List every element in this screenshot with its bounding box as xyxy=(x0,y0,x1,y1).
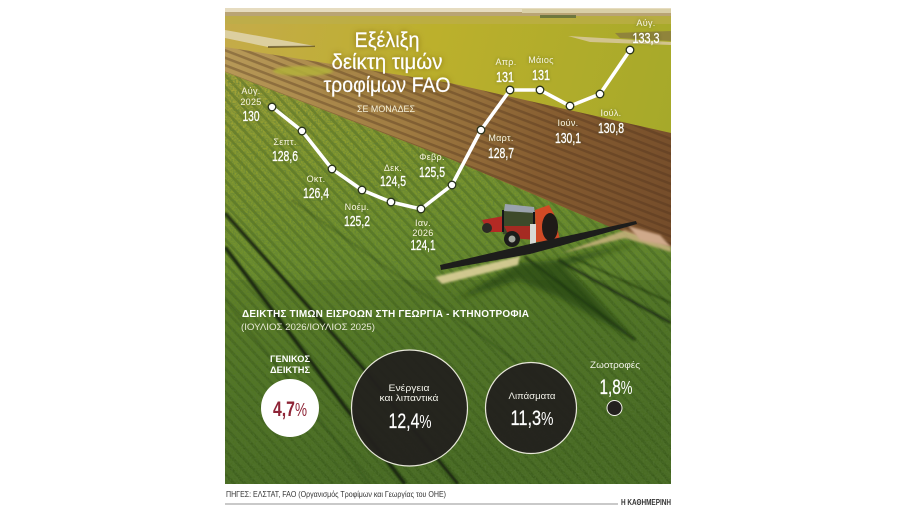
bubble: fertilizers: 11,3% xyxy=(510,407,554,430)
line chart: FAO index: Μάιος xyxy=(528,55,554,65)
bubble: general index: 4,7% xyxy=(273,398,307,421)
line chart: FAO index: Μαρτ. xyxy=(488,133,514,143)
line chart: FAO index: 2025 xyxy=(240,97,262,107)
line chart: FAO index: 128,6 xyxy=(272,148,298,165)
line chart: FAO index: 131 xyxy=(532,67,550,84)
line chart: FAO index xyxy=(240,18,660,254)
bubble: energy and lubricants: και λιπαντικά xyxy=(380,393,439,404)
line chart: FAO index: 130,8 xyxy=(598,120,624,137)
background photo: tractor in green field xyxy=(225,8,671,484)
bubble: energy and lubricants: Ενέργεια xyxy=(388,383,430,394)
line chart: FAO index: Οκτ. xyxy=(307,174,325,184)
title: Εξέλιξη xyxy=(354,29,420,52)
line chart: FAO index: 126,4 xyxy=(303,185,329,202)
tractor shadow xyxy=(460,242,637,338)
line chart: FAO index: 2026 xyxy=(412,228,434,238)
title: δείκτη τιμών xyxy=(332,51,442,74)
infographic xyxy=(225,8,671,505)
subtitle: units: ΣΕ ΜΟΝΑΔΕΣ xyxy=(357,104,415,114)
line chart: FAO index: Αύγ. xyxy=(636,18,656,28)
subheading: period: (ΙΟΥΛΙΟΣ 2026/ΙΟΥΛΙΟΣ 2025) xyxy=(241,322,375,333)
spray trail xyxy=(435,256,520,284)
bubble: animal feed: Ζωοτροφές xyxy=(590,360,640,371)
line chart: FAO index: 131 xyxy=(496,69,514,86)
line chart: FAO index: 125,5 xyxy=(419,164,445,181)
line chart: FAO index: 128,7 xyxy=(488,145,514,162)
bubble: general index: ΔΕΙΚΤΗΣ xyxy=(270,365,310,376)
line chart: FAO index: Δεκ. xyxy=(384,163,402,173)
heading: input price index: ΔΕΙΚΤΗΣ ΤΙΜΩΝ ΕΙΣΡΟΩΝ ΣΤΗ ΓΕΩΡΓΙΑ - ΚΤΗΝΟΤΡΟΦΙΑ xyxy=(242,309,529,320)
bubble: general index xyxy=(261,354,319,437)
title xyxy=(324,29,450,97)
line chart: FAO index: Ιούν. xyxy=(558,118,578,128)
field furrows xyxy=(225,200,671,484)
bubble: general index: ΓΕΝΙΚΟΣ xyxy=(270,354,310,365)
line chart: FAO index: Σεπτ. xyxy=(273,137,297,147)
line chart: FAO index: 124,5 xyxy=(380,173,406,190)
line chart: FAO index: 124,1 xyxy=(410,237,436,254)
line chart: FAO index: Φεβρ. xyxy=(419,152,445,162)
line chart: FAO index: Απρ. xyxy=(495,57,517,67)
bubble: fertilizers: Λιπάσματα xyxy=(508,391,556,402)
line chart: FAO index: Ιαν. xyxy=(415,218,431,228)
line chart: FAO index: 133,3 xyxy=(632,30,660,47)
source note: ΠΗΓΕΣ: ΕΛΣΤΑΤ, FAO (Οργανισμός Τροφίμων και Γεωργίας του ΟΗΕ) xyxy=(226,490,446,499)
bubble: energy and lubricants xyxy=(352,350,468,466)
line chart: FAO index: 130 xyxy=(242,108,260,125)
bubble: animal feed: 1,8% xyxy=(600,376,632,399)
tractor xyxy=(440,204,637,270)
line chart: FAO index: 125,2 xyxy=(344,213,370,230)
line chart: FAO index: 130,1 xyxy=(555,130,581,147)
bubble: fertilizers xyxy=(486,362,576,454)
line chart: FAO index: Νοέμ. xyxy=(345,202,369,212)
line chart: FAO index: Αύγ. xyxy=(241,86,261,96)
bubble: energy and lubricants: 12,4% xyxy=(388,410,432,433)
line chart: FAO index: Ιούλ. xyxy=(601,108,621,118)
title: τροφίμων FAO xyxy=(324,74,450,97)
bubble: animal feed xyxy=(590,360,640,416)
